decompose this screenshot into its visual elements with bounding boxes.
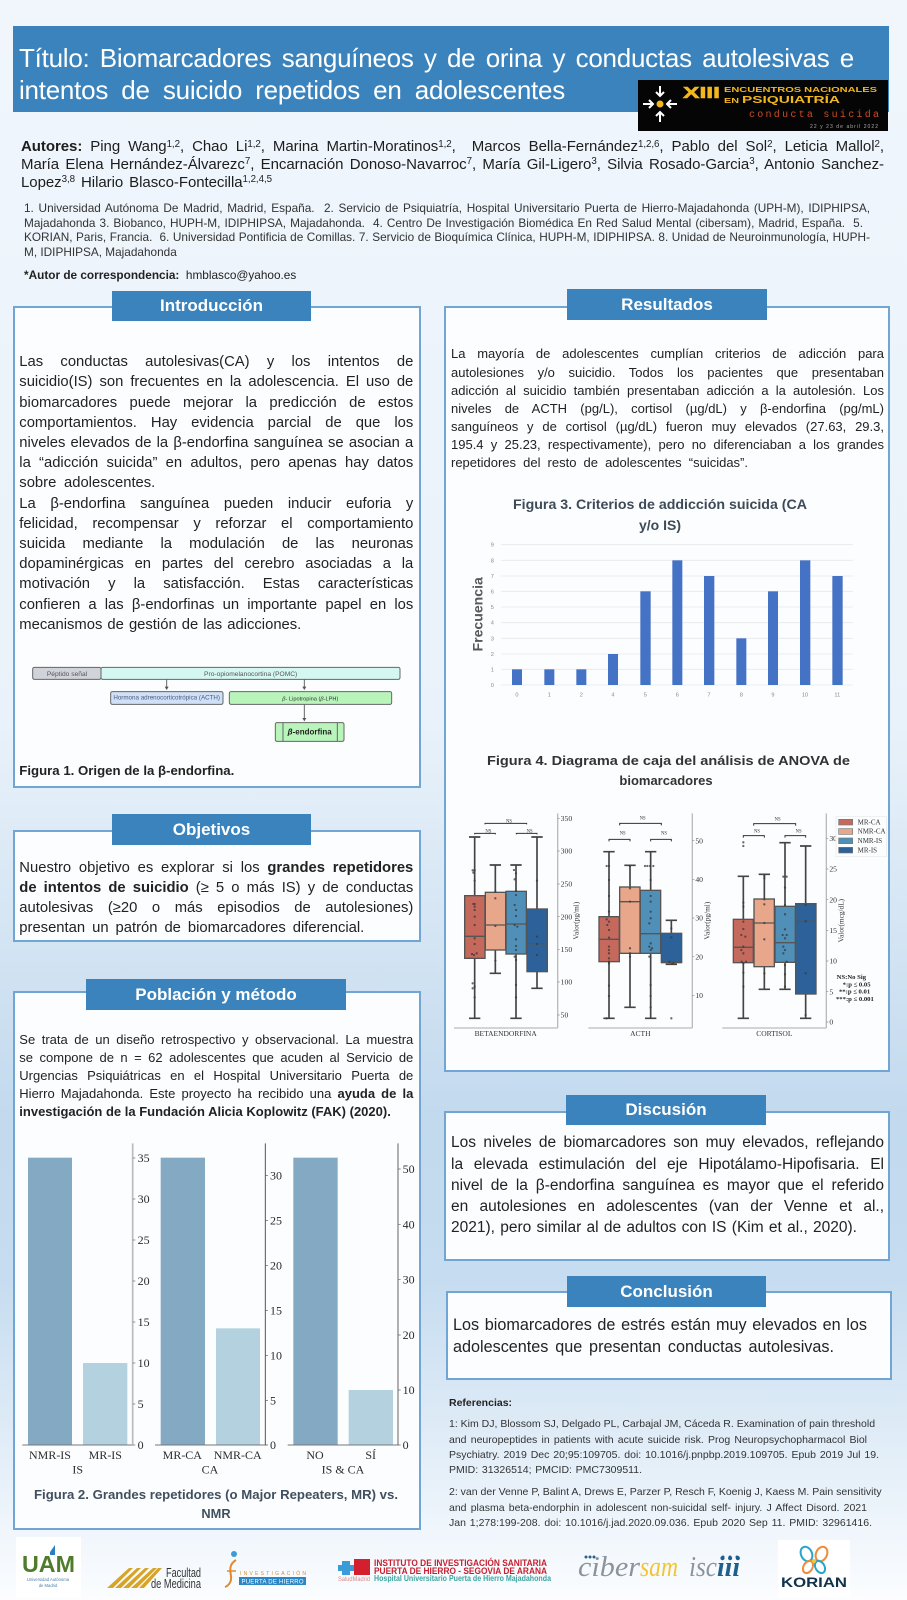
logo: cibersam: sam bbox=[640, 1552, 678, 1583]
box plot: betaendorfina: 50 bbox=[561, 1011, 568, 1020]
figure 3: bar chart: 5 bbox=[644, 693, 647, 699]
box plot: betaendorfina: NS bbox=[506, 819, 512, 824]
logo: UAM: Universidad Autónoma bbox=[27, 1577, 70, 1582]
box plot: cortisol: 20 bbox=[829, 895, 837, 904]
box plot: betaendorfina: 300 bbox=[561, 847, 572, 856]
figure 3: bar chart: 1 bbox=[491, 667, 494, 673]
box plot: ACTH: 40 bbox=[695, 875, 703, 884]
text: discusión: 2021), pero similar al de adultos con IS (Kim et al., 2020). bbox=[451, 1219, 857, 1236]
text: introducción: suicidio(IS) son frecuentes en la adolescencia. El uso de bbox=[19, 374, 413, 390]
heading: conclusión: Conclusión bbox=[620, 1282, 713, 1301]
heading: objetivos bbox=[112, 814, 311, 845]
panel: población y método bbox=[13, 979, 421, 1530]
box plot: betaendorfina bbox=[454, 813, 581, 1038]
bar chart: IS: MR-IS bbox=[89, 1448, 122, 1462]
bar chart: IS & CA: SÍ bbox=[365, 1448, 376, 1462]
panel: objetivos bbox=[13, 814, 421, 942]
text: introducción: suicida mediante la modulación de las neuronas bbox=[19, 536, 413, 552]
box plot: cortisol: 15 bbox=[829, 926, 837, 935]
bar chart: IS & CA: NO bbox=[306, 1448, 324, 1462]
reference 1: Psychiatry. 2019 Dec 20;95:109705. doi: 10.1016/j.pnpbp.2019.109705. Epub 2019 Jul 19. bbox=[449, 1449, 879, 1461]
legend: NMR-CA bbox=[858, 828, 886, 836]
logo: Investigación Puerta de Hierro bbox=[225, 1551, 306, 1587]
conference logo: XIII bbox=[683, 85, 720, 102]
reference 2: and plasma beta-endorphin in adolescent non-suicidal self- injury. J Affect Disord. 2021 bbox=[449, 1502, 867, 1514]
logo: isciii: iii bbox=[717, 1552, 740, 1583]
caption: figura 4 bbox=[487, 753, 850, 788]
box plot: betaendorfina: NS bbox=[527, 829, 533, 834]
box plot: betaendorfina: 150 bbox=[561, 945, 572, 954]
conference logo: 22 y 23 de abril 2022 bbox=[810, 124, 878, 130]
logo: KORIAN bbox=[778, 1540, 850, 1598]
bar chart: IS & CA: 0 bbox=[403, 1438, 409, 1452]
text: introducción: sobre adolescentes. bbox=[19, 475, 155, 491]
box plot: betaendorfina: 350 bbox=[561, 814, 572, 823]
text: resultados: La mayoría de adolescentes cumplían criterios de adicción para bbox=[451, 346, 884, 361]
logo: Investigación Puerta de Hierro: PUERTA DE HIERRO bbox=[242, 1580, 304, 1586]
affiliations: 1. Universidad Autónoma De Madrid, Madrid, España. 2. Servicio de Psiquiatría, Hospital Universitario Puerta de Hierro-Majadahonda (UPH-M), IDIPHIPSA, bbox=[24, 201, 870, 215]
figure 3: bar chart: 3 bbox=[491, 636, 494, 642]
heading: objetivos: Objetivos bbox=[173, 820, 250, 839]
box plot: cortisol: 30 bbox=[829, 834, 837, 843]
text: objetivos: Nuestro objetivo es explorar si los grandes repetidores bbox=[19, 860, 413, 876]
caption: figura 3: Figura 3. Criterios de addicción suicida (CA bbox=[513, 496, 807, 512]
figure 3: bar chart: 9 bbox=[491, 543, 494, 549]
text: conclusión bbox=[453, 1316, 867, 1356]
heading: discusión bbox=[566, 1095, 766, 1125]
text: introducción: Las conductas autolesivas(CA) y los intentos de bbox=[19, 354, 413, 370]
text: resultados: niveles de ACTH (pg/L), cortisol (µg/dL) y β-endorfina (pg/mL) bbox=[451, 401, 884, 416]
box plot: ACTH: 50 bbox=[695, 836, 703, 845]
significance key: *:p ≤ 0.05 bbox=[843, 981, 871, 988]
heading: conclusión bbox=[567, 1276, 766, 1307]
box plot: cortisol: 5 bbox=[829, 987, 833, 996]
box plot: ACTH: NS bbox=[620, 832, 626, 837]
text: objetivos bbox=[19, 860, 413, 936]
logo: Instituto de Investigación Sanitaria: Hospital Universitario Puerta de Hierro Majadahonda bbox=[374, 1574, 551, 1583]
heading: discusión: Discusión bbox=[625, 1100, 707, 1119]
bar chart: IS: 5 bbox=[138, 1397, 144, 1411]
figure 3: bar chart: 9 bbox=[771, 693, 775, 699]
text: introducción: comportamientos. Hay evidencia parcial de que los bbox=[19, 415, 413, 431]
bar chart: CA: 25 bbox=[270, 1214, 282, 1228]
text: resultados: sanguíneos y de cortisol (µg/dL) fueron muy elevados (27.63, 29.3, bbox=[451, 419, 884, 434]
box plot: betaendorfina: 100 bbox=[561, 978, 572, 987]
text: población y método: investigación de la Fundación Alicia Koplowitz (FAK) (2020). bbox=[19, 1104, 391, 1119]
heading: resultados bbox=[567, 289, 767, 320]
logo: cibersam bbox=[578, 1552, 678, 1583]
logo: Facultad de Medicina: de Medicina bbox=[151, 1577, 201, 1591]
text: resultados: autolesiones y/o suicidio. Todos los pacientes que presentaban bbox=[451, 365, 884, 380]
bar chart: CA: NMR-CA bbox=[214, 1448, 262, 1462]
conference logo: ENCUENTROS NACIONALES bbox=[724, 85, 877, 94]
figure 3: bar chart: 0 bbox=[491, 683, 494, 689]
caption: figura 2: NMR bbox=[201, 1506, 231, 1521]
reference 2 bbox=[449, 1486, 882, 1529]
significance key: ***:p ≤ 0.001 bbox=[836, 996, 874, 1003]
legend: MR-CA bbox=[858, 818, 881, 826]
figure 3: bar chart: 4 bbox=[491, 621, 494, 627]
text: resultados: adicción al suicidio también presentaban adicción a la autolesión. Los bbox=[451, 383, 884, 398]
box plot: cortisol: CORTISOL bbox=[756, 1029, 793, 1038]
logo: Instituto de Investigación Sanitaria bbox=[338, 1557, 551, 1583]
figure 3: bar chart: 7 bbox=[491, 574, 494, 580]
bar chart: CA: 10 bbox=[270, 1349, 282, 1363]
text: resultados bbox=[451, 346, 884, 470]
figure 3: bar chart: 2 bbox=[580, 693, 583, 699]
bar chart: IS & CA bbox=[288, 1143, 415, 1476]
text: introducción: motivación y la satisfacción. Estas características bbox=[19, 576, 413, 592]
text: discusión bbox=[451, 1134, 884, 1236]
text: discusión: en autolesiones en adolescentes (van der Venne et al., bbox=[451, 1198, 884, 1215]
box plot: cortisol: NS bbox=[754, 829, 760, 834]
caption: figura 4: Figura 4. Diagrama de caja del análisis de ANOVA de bbox=[487, 753, 850, 768]
box plot: ACTH bbox=[588, 813, 712, 1038]
bar chart: CA: CA bbox=[202, 1462, 219, 1476]
logo: Instituto de Investigación Sanitaria: INSTITUTO DE INVESTIGACIÓN SANITARIA bbox=[374, 1557, 547, 1569]
caption: figura 2: Figura 2. Grandes repetidores (o Major Repeaters, MR) vs. bbox=[34, 1487, 398, 1502]
text: introducción: confieren a las β-endorfinas un importante papel en los bbox=[19, 597, 413, 613]
logo: Investigación Puerta de Hierro: INVESTIGACIÓN bbox=[240, 1570, 306, 1577]
title text: Título: Biomarcadores sanguíneos y de orina y conductas autolesivas e bbox=[19, 43, 854, 73]
logo: UAM bbox=[16, 1537, 81, 1598]
text: introducción: niveles elevados de la β-endorfina sanguínea se asocian a bbox=[19, 435, 413, 451]
figure 3: bar chart: 5 bbox=[491, 605, 494, 611]
box plot: betaendorfina: 250 bbox=[561, 880, 572, 889]
bar chart: CA: 15 bbox=[270, 1304, 282, 1318]
bar chart: IS bbox=[22, 1143, 150, 1476]
logo: Instituto de Investigación Sanitaria: SaludMadrid bbox=[338, 1577, 370, 1583]
text: resultados: 195.4 y 25.23, respectivamente), pero no diferenciaban a los grandes bbox=[451, 437, 884, 452]
box plot: betaendorfina: NS bbox=[485, 829, 492, 834]
figure 3: bar chart: 0 bbox=[515, 693, 519, 699]
reference 2: Jan 1;278:199-208. doi: 10.1016/j.jad.2020.09.036. Epub 2020 Sep 11. PMID: 32961416. bbox=[449, 1517, 872, 1529]
logo: UAM: de Madrid bbox=[39, 1583, 58, 1588]
reference 1: 1: Kim DJ, Blossom SJ, Delgado PL, Carbajal JM, Cáceda R. Examination of pain threshold bbox=[449, 1418, 875, 1430]
figure 2: bar charts bbox=[22, 1143, 415, 1521]
bar chart: CA: 5 bbox=[270, 1394, 276, 1408]
bar chart: IS & CA: IS & CA bbox=[322, 1462, 365, 1476]
text: introducción: felicidad, recompensar y reforzar el comportamiento bbox=[19, 516, 413, 532]
panel: resultados bbox=[444, 289, 890, 1072]
bar chart: IS: 35 bbox=[138, 1151, 150, 1165]
text: población y método: Urgencias Psiquiátricas en el Hospital Universitario Puerta de bbox=[19, 1068, 413, 1083]
box plot: cortisol: 25 bbox=[829, 865, 837, 874]
logo: isciii: isc bbox=[689, 1552, 718, 1583]
caption: figura 4: biomarcadores bbox=[619, 773, 713, 788]
heading: introducción: Introducción bbox=[160, 296, 263, 315]
caption: figura 2 bbox=[34, 1487, 398, 1521]
figure 3: bar chart bbox=[471, 496, 852, 699]
reference 1 bbox=[449, 1418, 879, 1476]
figure 3: bar chart: 1 bbox=[548, 693, 551, 699]
logo: UAM: UAM bbox=[22, 1551, 75, 1577]
text: introducción: la “adicción suicida” en adultos, pero apenas hay datos bbox=[19, 455, 413, 471]
legend: MR-IS bbox=[858, 846, 877, 854]
icon: converging arrows bbox=[643, 86, 677, 122]
conference logo bbox=[638, 80, 888, 131]
affiliations: KORIAN, Paris, Francia. 6. Universidad Pontificia de Comillas. 7. Servicio de Bioquímica Clínica, HUPH-M, IDIPHIPSA. 8. Unidad de Neuroinmunología, HUPH- bbox=[24, 230, 870, 244]
box plot: ACTH: 10 bbox=[695, 991, 703, 1000]
bar chart: CA: 0 bbox=[270, 1438, 276, 1452]
conference logo: PSIQUIATRÍA bbox=[742, 93, 841, 106]
references heading: Referencias: bbox=[449, 1397, 512, 1409]
figure 3: bar chart: 8 bbox=[491, 558, 494, 564]
text: conclusión: adolescentes que presentan conductas autolesivas. bbox=[453, 1338, 834, 1356]
figure 3: bar chart: 6 bbox=[491, 589, 494, 595]
box plot: betaendorfina: Valor(pg/ml) bbox=[572, 901, 581, 940]
heading: introducción bbox=[112, 291, 311, 321]
significance key: **:p ≤ 0.01 bbox=[839, 989, 870, 996]
text: resultados: repetidores del resto de adolescentes “suicidas”. bbox=[451, 455, 748, 470]
box plot: cortisol bbox=[722, 813, 887, 1038]
figure 3: bar chart: 10 bbox=[802, 693, 808, 699]
bar chart: IS & CA: 20 bbox=[403, 1328, 415, 1342]
bar chart: IS & CA: 30 bbox=[403, 1273, 415, 1287]
caption: figura 3: y/o IS) bbox=[639, 517, 681, 533]
box plot: ACTH: NS bbox=[661, 832, 667, 837]
reference 1: PMID: 31326514; PMCID: PMC7309511. bbox=[449, 1464, 642, 1476]
bar chart: IS: 0 bbox=[138, 1438, 144, 1452]
text: introducción: La β-endorfina sanguínea pueden inducir euforia y bbox=[19, 496, 413, 512]
logo: KORIAN: KORIAN bbox=[781, 1574, 847, 1590]
text: objetivos: autolesivas (≥20 o más episodios de autolesiones) bbox=[19, 900, 413, 916]
box plot: ACTH: ACTH bbox=[630, 1029, 651, 1038]
caption: figura 3 bbox=[513, 496, 807, 533]
text: discusión: nivel de la β-endorfina sanguínea es mayor que el referido bbox=[451, 1177, 884, 1194]
logo: cibersam: ciber bbox=[578, 1552, 640, 1583]
conference logo: EN bbox=[724, 98, 739, 105]
text: discusión: Los niveles de biomarcadores son muy elevados, reflejando bbox=[451, 1134, 884, 1151]
text: introducción: mecanismos de gestión de las adicciones. bbox=[19, 617, 301, 633]
bar chart: IS & CA: 10 bbox=[403, 1383, 415, 1397]
figure 3: bar chart: Frecuencia bbox=[471, 577, 486, 651]
figure 1: POMC diagram: β- Lipotropina (β-LPH) bbox=[281, 696, 339, 702]
title text: intentos de suicido repetidos en adolescentes bbox=[19, 75, 565, 105]
bar chart: IS: 15 bbox=[138, 1315, 150, 1329]
box plot: betaendorfina: 200 bbox=[561, 912, 572, 921]
box plot: cortisol: NS bbox=[796, 829, 802, 834]
box plot: ACTH: 20 bbox=[695, 952, 703, 961]
bar chart: IS: 30 bbox=[138, 1192, 150, 1206]
text: discusión: la elevada estimulación del eje Hipotálamo-Hipofisaria. El bbox=[451, 1156, 884, 1173]
bar chart: CA: MR-CA bbox=[163, 1448, 202, 1462]
bar chart: CA bbox=[155, 1143, 282, 1476]
title text bbox=[19, 43, 854, 105]
heading: población y método bbox=[86, 979, 346, 1010]
text: introducción bbox=[19, 354, 414, 633]
text: población y método: Hierro Majadahonda. Este proyecto ha recibido una ayuda de la bbox=[19, 1086, 413, 1101]
bar chart: IS & CA: 50 bbox=[403, 1162, 415, 1176]
box plot: ACTH: Valor(pg/ml) bbox=[703, 901, 712, 940]
references bbox=[449, 1397, 882, 1529]
bar chart: IS: 10 bbox=[138, 1356, 150, 1370]
bar chart: IS: 20 bbox=[138, 1274, 150, 1288]
box plot: ACTH: NS bbox=[640, 817, 646, 822]
figure 3: bar chart: 8 bbox=[740, 693, 743, 699]
bar chart: IS: IS bbox=[72, 1462, 83, 1476]
bar chart: CA: 30 bbox=[270, 1169, 282, 1183]
text: población y método: se compone de n = 62 adolescentes que acuden al Servicio de bbox=[19, 1050, 413, 1065]
box plot: cortisol: NS bbox=[775, 817, 781, 822]
text: objetivos: presentan un patrón de biomarcadores diferencial. bbox=[19, 920, 364, 936]
authors bbox=[21, 138, 884, 191]
legend bbox=[836, 817, 887, 857]
authors: María Elena Hernández-Álvarezc7, Encarnación Donoso-Navarroc7, María Gil-Ligero3, Silvia Rosado-Garcia3, Antonio Sanchez- bbox=[21, 156, 884, 173]
figure 3: bar chart: 2 bbox=[491, 652, 494, 658]
figure 1: POMC diagram bbox=[19, 666, 400, 778]
panel: conclusión bbox=[446, 1276, 892, 1380]
text: introducción: dopaminérgicas en partes del cerebro asociadas a la bbox=[19, 556, 413, 572]
bar chart: IS: NMR-IS bbox=[29, 1448, 71, 1462]
authors: Lopez3,8 Hilario Blasco-Fontecilla1,2,4,5 bbox=[21, 174, 272, 191]
legend: NMR-IS bbox=[858, 837, 882, 845]
figure 3: bar chart: 6 bbox=[676, 693, 679, 699]
affiliations: Majadahonda 3. Biobanco, HUPH-M, IDIPHIPSA, Majadahonda. 4. Centro De Investigación Biomédica En Red Salud Mental (cibersam), Madrid, España. 5. bbox=[24, 216, 863, 230]
box plot: ACTH: 30 bbox=[695, 914, 703, 923]
figure 3: bar chart: 4 bbox=[611, 693, 615, 699]
logo: Instituto de Investigación Sanitaria: PUERTA DE HIERRO - SEGOVIA DE ARANA bbox=[374, 1566, 547, 1577]
conference logo: conducta suicida bbox=[749, 109, 879, 121]
reference 1: and neuropeptides in patients with acute suicide risk. Prog Neuropsychopharmacol Biol bbox=[449, 1434, 867, 1446]
text: población y método: Se trata de un diseño retrospectivo y observacional. La muestra bbox=[19, 1032, 413, 1047]
affiliations: M, IDIPHIPSA, Majadahonda bbox=[24, 245, 177, 259]
logos row bbox=[16, 1537, 850, 1591]
heading: resultados: Resultados bbox=[621, 295, 713, 314]
logo: Facultad de Medicina: Facultad bbox=[166, 1566, 201, 1580]
figure 1: POMC diagram: Péptido señal bbox=[47, 671, 88, 678]
box plot: betaendorfina: BETAENDORFINA bbox=[475, 1029, 537, 1038]
panel: discusión bbox=[444, 1095, 890, 1261]
panel: introducción bbox=[13, 291, 421, 788]
figure 3: bar chart: 11 bbox=[834, 693, 840, 699]
box plot: cortisol: 10 bbox=[829, 957, 837, 966]
box plot: cortisol: 0 bbox=[829, 1018, 833, 1027]
heading: población y método: Población y método bbox=[135, 985, 297, 1004]
text: introducción: biomarcadores puede mejorar la predicción de estos bbox=[19, 394, 413, 410]
figure 4: box plots bbox=[454, 753, 887, 1038]
figure 1: POMC diagram: Pro-opiomelanocortina (POMC) bbox=[204, 671, 297, 678]
corresponding author: *Autor de correspondencia: hmblasco@yahoo.es bbox=[24, 268, 296, 282]
figure 1: POMC diagram: β-endorfina bbox=[287, 727, 332, 736]
logo: Facultad de Medicina bbox=[107, 1566, 201, 1591]
title banner bbox=[13, 26, 889, 112]
figure 1: POMC diagram: Hormona adrenocorticotrópica (ACTH) bbox=[113, 695, 220, 702]
significance key: NS:No Sig bbox=[837, 974, 867, 981]
affiliations bbox=[24, 201, 870, 259]
box plot: cortisol: Valor(mcg/dL) bbox=[837, 898, 846, 942]
bar chart: CA: 20 bbox=[270, 1259, 282, 1273]
bar chart: IS & CA: 40 bbox=[403, 1217, 415, 1231]
bar chart: IS: 25 bbox=[138, 1233, 150, 1247]
text: conclusión: Los biomarcadores de estrés están muy elevados en los bbox=[453, 1316, 867, 1334]
significance key bbox=[836, 974, 874, 1003]
logo: isciii bbox=[689, 1552, 740, 1583]
caption: figura 1: Figura 1. Origen de la β-endorfina. bbox=[19, 763, 234, 778]
text: objetivos: de intentos de suicidio (≥ 5 o más IS) y de conductas bbox=[19, 880, 413, 896]
reference 2: 2: van der Venne P, Balint A, Drews E, Parzer P, Resch F, Koenig J, Kaess M. Pain sensitivity bbox=[449, 1486, 882, 1498]
text: población y método bbox=[19, 1032, 414, 1119]
figure 3: bar chart: 7 bbox=[707, 693, 711, 699]
authors: Autores: Ping Wang1,2, Chao Li1,2, Marina Martin-Moratinos1,2, Marcos Bella-Fernández1,2,6, Pablo del Sol2, Leticia Mallol2, bbox=[21, 138, 884, 155]
